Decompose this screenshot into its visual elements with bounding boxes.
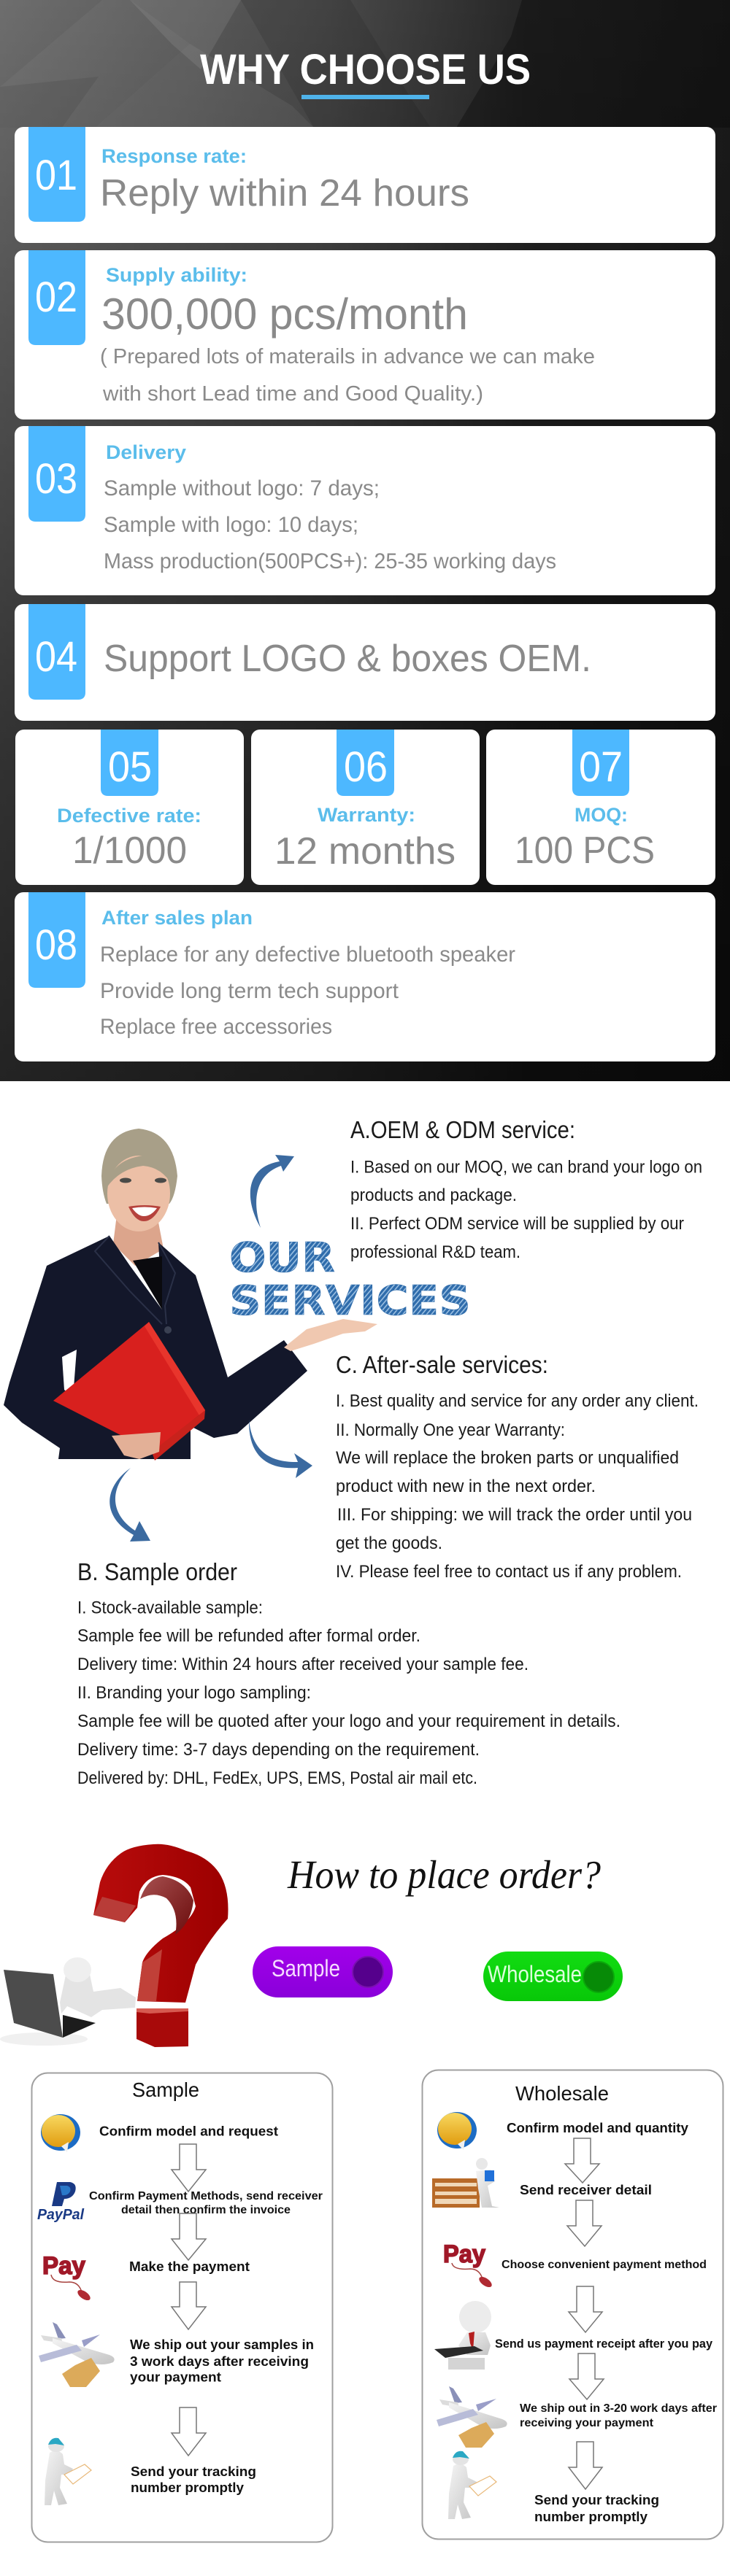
panel title: wholesale: Wholesale — [515, 2082, 609, 2105]
step text: confirm model and quantity: Confirm model and quantity — [507, 2121, 688, 2135]
panel: 01 response rate — [15, 127, 715, 243]
wordmark: our services — [229, 1234, 471, 1325]
step text: ship out: receiving your payment — [520, 2417, 654, 2429]
title underline — [301, 95, 429, 99]
arrow to B — [110, 1468, 150, 1542]
step text: choose payment method: Choose convenient payment method — [502, 2259, 707, 2271]
arrow — [567, 2200, 602, 2246]
text block: C after-sale services: I. Best quality and service for any order any client. — [336, 1391, 699, 1411]
step text: tracking number — [131, 2464, 256, 2495]
note text: with short Lead time and Good Quality.) — [102, 382, 483, 406]
icon: plane and boxes — [437, 2386, 507, 2448]
step text: ship out: We ship out your samples in — [130, 2337, 314, 2352]
text block: A OEM and ODM: I. Based on our MOQ, we can brand your logo on — [350, 1157, 702, 1177]
icon: chat bubble — [41, 2114, 80, 2152]
text block: C after-sale services: C. After-sale services: — [336, 1351, 548, 1378]
delivery times: Mass production(500PCS+): 25-35 working days — [104, 549, 556, 573]
step text: tracking number: Send your tracking — [534, 2493, 659, 2507]
icon: figure at tablet — [434, 2301, 491, 2370]
badge 04 — [28, 604, 85, 700]
after sales list — [100, 943, 515, 1039]
button: sample — [253, 1946, 393, 1997]
panel: 02 supply ability — [15, 250, 715, 419]
text block: C after-sale services: IV. Please feel free to contact us if any problem. — [336, 1562, 682, 1582]
arrow — [569, 2286, 602, 2332]
badge 01: 01 — [35, 152, 77, 199]
icon: figure with laptop — [0, 1957, 136, 2046]
text block: A OEM and ODM — [350, 1116, 702, 1262]
label: defective rate: Defective rate: — [57, 805, 201, 827]
step text: ship out: your payment — [130, 2370, 221, 2384]
step text: tracking number — [534, 2493, 659, 2524]
step text: make the payment: Make the payment — [129, 2259, 250, 2274]
note text: ( Prepared lots of materails in advance we can make — [100, 345, 595, 368]
badge 07: 07 — [579, 743, 623, 791]
panel: wholesale flow — [422, 2070, 723, 2539]
badge 08 — [28, 892, 85, 988]
step text: confirm payment methods: Confirm Payment Methods, send receiver — [89, 2190, 323, 2202]
badge 08: 08 — [35, 921, 77, 969]
arrow — [172, 2144, 206, 2192]
text block: C after-sale services: get the goods. — [336, 1533, 442, 1553]
text block: A OEM and ODM: professional R&D team. — [350, 1242, 520, 1262]
label: MOQ: MOQ: — [575, 804, 628, 826]
text block: A OEM and ODM: II. Perfect ODM service will be supplied by our — [350, 1214, 684, 1234]
after sales list: Replace for any defective bluetooth speaker — [100, 943, 515, 967]
badge 04: 04 — [35, 633, 77, 681]
text block: A OEM and ODM: A.OEM & ODM service: — [350, 1116, 575, 1143]
badge 07 — [572, 730, 629, 796]
note text — [100, 345, 595, 406]
badge 02 — [28, 250, 85, 345]
text block: B sample order: Sample fee will be refunded after formal order. — [77, 1626, 420, 1646]
arrow to C — [249, 1420, 312, 1478]
panel: sample flow — [32, 2073, 333, 2542]
step text: send receiver detail: Send receiver detail — [520, 2183, 652, 2197]
value: 1/1000: 1/1000 — [72, 829, 187, 872]
text block: B sample order: II. Branding your logo sampling: — [77, 1683, 311, 1703]
badge 06: 06 — [344, 743, 388, 791]
step text: confirm payment methods: detail then confirm the invoice — [121, 2204, 291, 2216]
badge 06 — [337, 730, 394, 796]
button: sample: Sample — [272, 1955, 340, 1981]
icon: paypal: PayPal — [37, 2207, 84, 2223]
text block: B sample order: Delivered by: DHL, FedEx, UPS, EMS, Postal air mail etc. — [77, 1768, 477, 1788]
text block: A OEM and ODM: products and package. — [350, 1185, 517, 1205]
text block: B sample order: B. Sample order — [77, 1558, 237, 1585]
delivery times: Sample with logo: 10 days; — [104, 513, 358, 537]
delivery times — [104, 476, 556, 573]
step text: tracking number: number promptly — [534, 2510, 648, 2524]
icon: plane and boxes — [39, 2322, 115, 2387]
step text: ship out: 3 work days after receiving — [130, 2354, 309, 2369]
arrow — [172, 2213, 206, 2260]
wordmark: our services: SERVICES — [229, 1277, 471, 1325]
button: wholesale — [483, 1952, 623, 2001]
label: warranty: Warranty: — [318, 804, 415, 826]
section: why choose us — [0, 0, 730, 1081]
icon: pay mouse: Pay — [443, 2240, 485, 2268]
icon: paypal — [37, 2182, 84, 2223]
text block: B sample order: Delivery time: 3-7 days depending on the requirement. — [77, 1740, 480, 1760]
value: 300,000 pcs/month: 300,000 pcs/month — [101, 290, 468, 339]
label: response rate: Response rate: — [101, 145, 247, 167]
arrow — [172, 2282, 206, 2329]
photo: businesswoman with red folder — [4, 1129, 377, 1461]
badge 05 — [101, 730, 158, 796]
step text: payment receipt: Send us payment receipt after you pay — [495, 2337, 713, 2351]
value: 100 PCS: 100 PCS — [515, 829, 655, 872]
arrow — [569, 2442, 602, 2489]
arrow — [172, 2407, 206, 2456]
icon: courier with clipboard — [45, 2438, 91, 2505]
icon: red question mark — [93, 1844, 228, 2047]
button: wholesale: Wholesale — [488, 1961, 582, 1987]
step text: tracking number: number promptly — [131, 2480, 244, 2495]
after sales list: Provide long term tech support — [100, 979, 399, 1003]
step text: ship out — [520, 2402, 717, 2429]
value: reply within 24 hours: Reply within 24 hours — [100, 172, 469, 214]
text block: B sample order: Delivery time: Within 24 hours after received your sample fee. — [77, 1655, 529, 1674]
step text: tracking number: Send your tracking — [131, 2464, 256, 2479]
panel: 08 after sales plan — [15, 892, 715, 1061]
panel: 07 MOQ — [486, 730, 715, 885]
arrow — [565, 2138, 599, 2183]
text block: C after-sale services: II. Normally One year Warranty: — [336, 1420, 565, 1440]
step text: confirm payment methods — [89, 2190, 323, 2216]
text block: C after-sale services: III. For shipping: we will track the order until you — [337, 1505, 692, 1525]
title: WHY CHOOSE US — [200, 46, 531, 93]
arrow — [569, 2353, 604, 2399]
value: 12 months: 12 months — [274, 830, 456, 873]
label: supply ability: Supply ability: — [106, 264, 247, 286]
panel: 04 logo support — [15, 604, 715, 721]
badge 03 — [28, 426, 85, 522]
text block: C after-sale services: product with new in the next order. — [336, 1477, 596, 1496]
wordmark: our services: OUR — [229, 1234, 335, 1282]
text block: C after-sale services — [336, 1351, 699, 1582]
text block: B sample order: Sample fee will be quoted after your logo and your requirement in details. — [77, 1711, 620, 1731]
badge 05: 05 — [108, 743, 152, 791]
badge 02: 02 — [35, 274, 77, 321]
heading: how to place order: How to place order? — [287, 1852, 601, 1897]
badge 01 — [28, 127, 85, 222]
label: delivery: Delivery — [106, 441, 186, 463]
step text: ship out: We ship out in 3-20 work days after — [520, 2402, 717, 2415]
section: our services — [4, 1116, 702, 1788]
icon: abacus figure — [432, 2158, 499, 2208]
text: support logo: Support LOGO & boxes OEM. — [104, 638, 591, 680]
text block: C after-sale services: We will replace the broken parts or unqualified — [336, 1448, 679, 1468]
section: how to place order — [0, 1844, 723, 2542]
text block: B sample order — [77, 1558, 620, 1788]
label: after sales plan: After sales plan — [101, 907, 253, 929]
dark faceted background — [0, 0, 730, 1081]
panel: 05 defective rate — [15, 730, 244, 885]
text block: B sample order: I. Stock-available sample: — [77, 1598, 263, 1618]
arrow to A — [250, 1155, 294, 1228]
icon: pay mouse: Pay — [42, 2252, 85, 2280]
step text: ship out — [130, 2337, 314, 2384]
panel: 03 delivery — [15, 426, 715, 595]
delivery times: Sample without logo: 7 days; — [104, 476, 380, 500]
panel title: sample: Sample — [132, 2078, 199, 2101]
icon: pay mouse — [42, 2252, 92, 2302]
panel: 06 warranty — [251, 730, 480, 885]
icon: chat bubble — [437, 2112, 477, 2150]
after sales list: Replace free accessories — [100, 1015, 332, 1039]
badge 03: 03 — [35, 455, 77, 503]
step text: confirm model: Confirm model and request — [99, 2124, 278, 2139]
icon: pay mouse — [443, 2240, 493, 2289]
icon: courier with clipboard — [448, 2451, 496, 2519]
